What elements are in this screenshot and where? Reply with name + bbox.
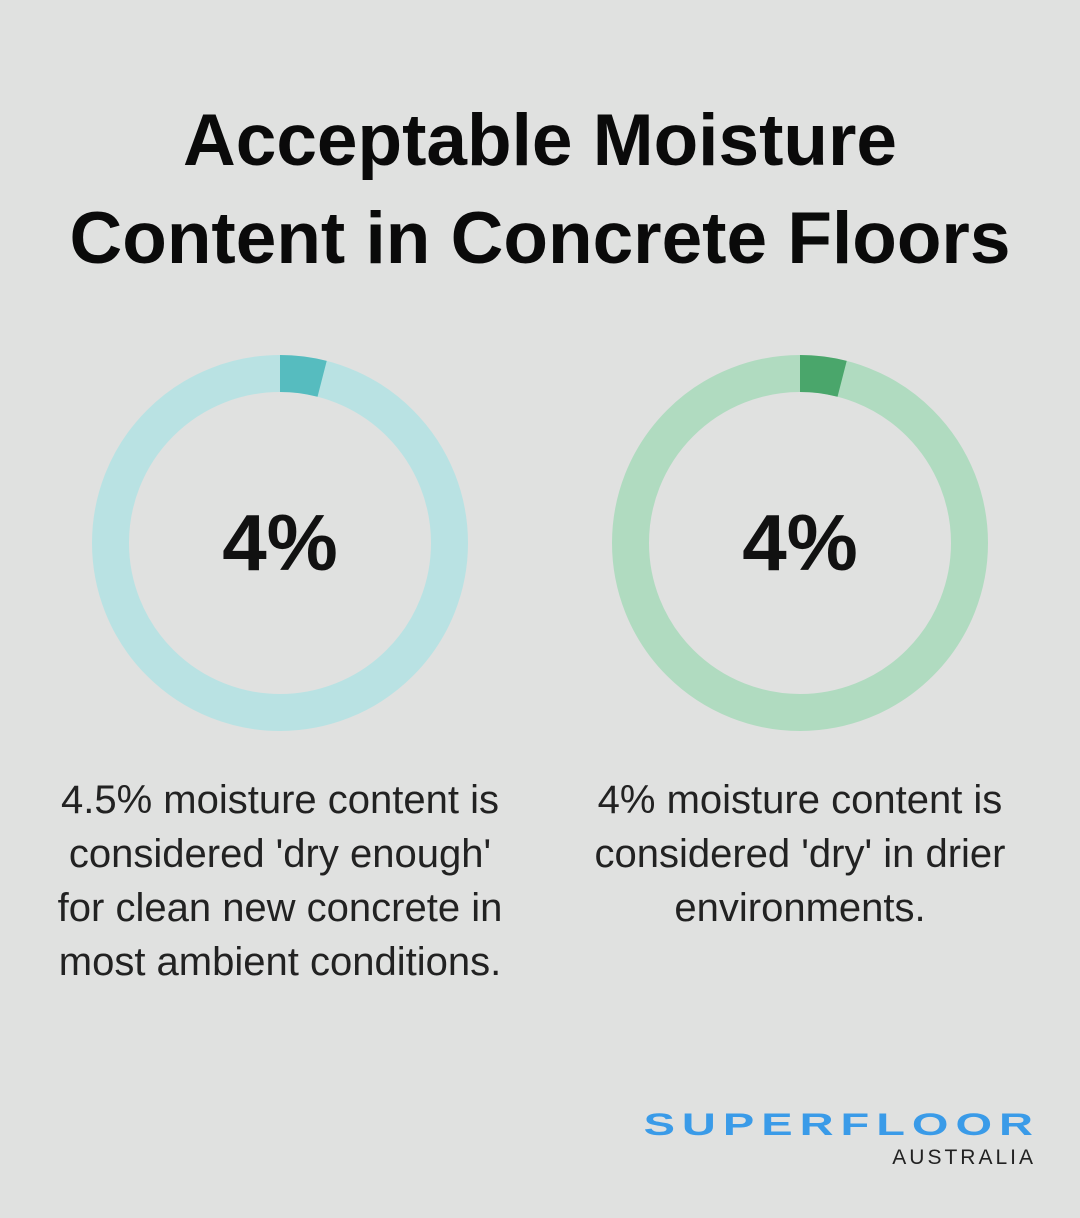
text: left description: for clean new concrete in <box>58 886 502 930</box>
text: right description <box>594 778 1006 930</box>
title: Content in Concrete Floors <box>70 198 1010 279</box>
donut chart: right <box>612 355 988 731</box>
text: left description: considered 'dry enough' <box>69 832 491 876</box>
donut chart: left <box>92 355 468 731</box>
text: right description: environments. <box>674 886 926 930</box>
text: right description: considered 'dry' in drier <box>594 832 1006 876</box>
logo: SUPERFLOOR <box>644 1107 1040 1142</box>
number: left: 4% <box>222 498 338 587</box>
text: left description <box>58 778 502 984</box>
title <box>70 100 1010 279</box>
text: left description: 4.5% moisture content is <box>61 778 499 822</box>
text: right description: 4% moisture content is <box>598 778 1002 822</box>
title: Acceptable Moisture <box>183 100 897 181</box>
number: right: 4% <box>742 498 858 587</box>
text: left description: most ambient conditions. <box>59 940 501 984</box>
logo <box>644 1107 1040 1169</box>
logo: AUSTRALIA <box>892 1146 1036 1169</box>
